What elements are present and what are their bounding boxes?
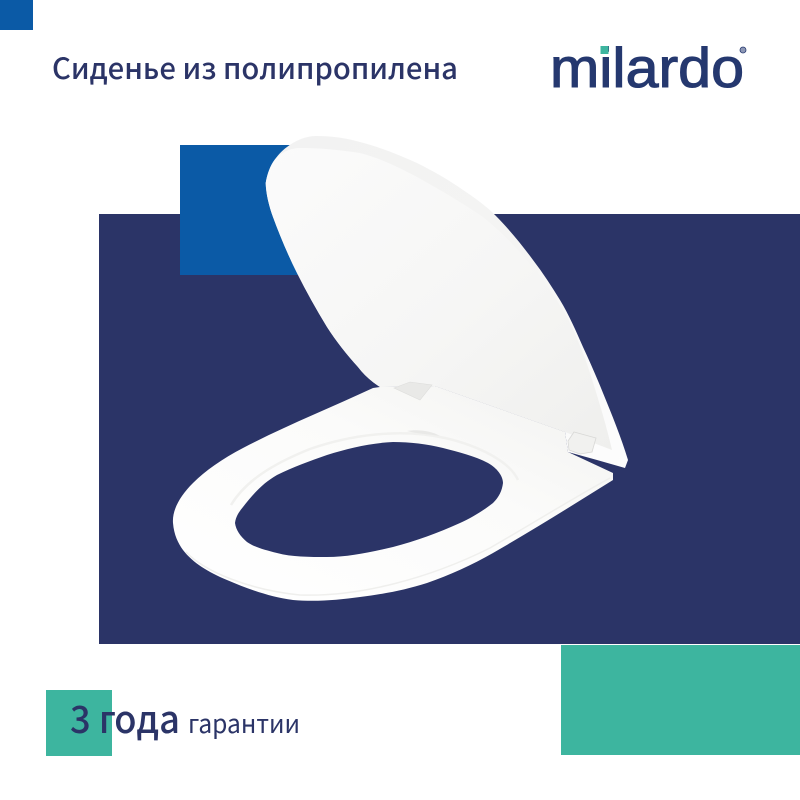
- lid hinge right: [568, 432, 596, 454]
- lid: [266, 136, 628, 468]
- seat inner bevel: [231, 433, 518, 505]
- lid hinge left: [394, 382, 432, 400]
- lid inner face: [266, 148, 612, 450]
- blue square behind lid: [180, 145, 310, 275]
- seat highlight: [407, 430, 440, 436]
- seat outer edge shadow: [186, 478, 610, 595]
- teal block bottom right: [561, 645, 800, 755]
- corner accent square: [0, 0, 33, 30]
- warranty years: 3 года: [70, 689, 180, 744]
- seat ring: [173, 386, 613, 601]
- product: toilet seat with raised lid: [173, 136, 628, 601]
- title: Сиденье из полипропилена: [52, 46, 458, 88]
- warranty label: гарантии: [188, 704, 300, 741]
- teal square behind warranty: [46, 690, 112, 756]
- logo: milardo: milardo: [550, 36, 744, 99]
- navy panel: [99, 214, 800, 644]
